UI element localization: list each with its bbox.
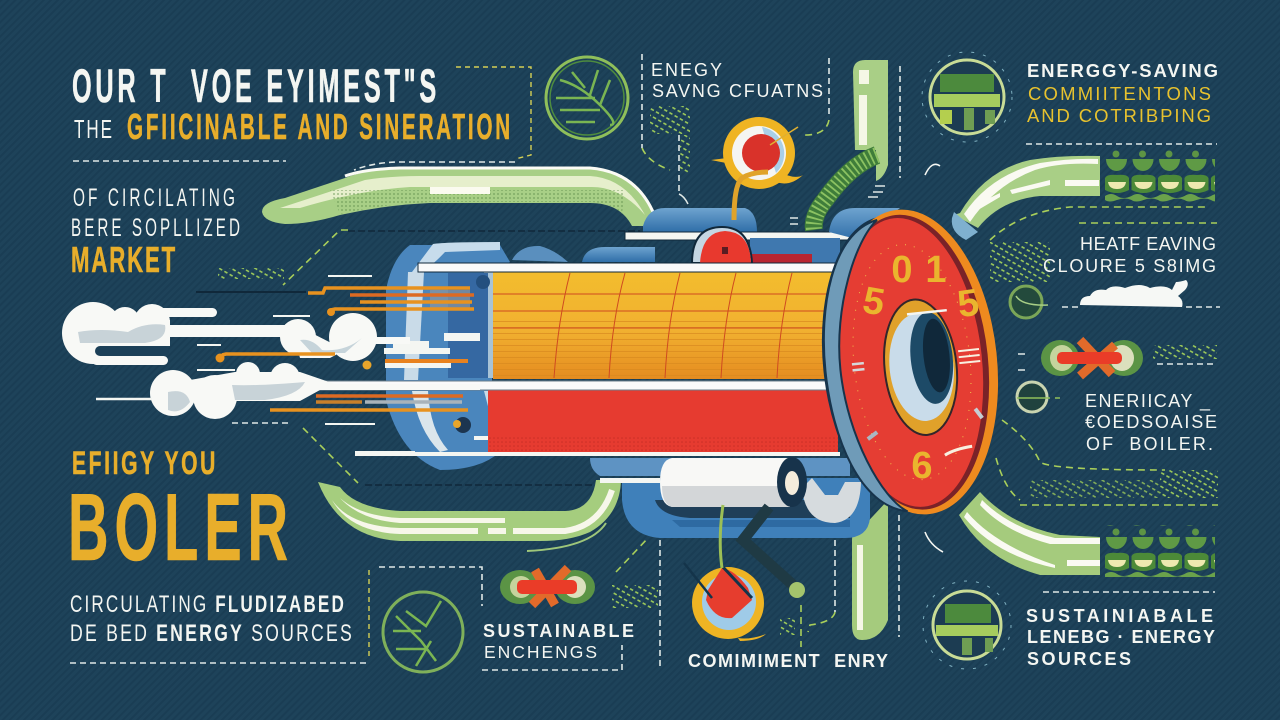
boiler heading: [68, 445, 294, 581]
dial numbers: 1: [925, 249, 947, 291]
boiler subtext: DE BED ENERGY SOURCES: [70, 620, 354, 647]
frame dashes and connectors: [70, 230, 899, 670]
label: commitment energy: COMIMIMENT ENRY: [688, 651, 888, 671]
label: sustainable energy sources: [1026, 606, 1215, 669]
pipe: lower right green: [925, 492, 1100, 575]
label: energy saving commitments: ENERGGY-SAVING: [1027, 60, 1218, 81]
subheading market: [71, 184, 243, 280]
dial numbers: [860, 249, 982, 487]
icon: small green circle upper: [1010, 286, 1048, 318]
label: sustainable enchengs: ENCHENGS: [484, 642, 597, 662]
right connector dashes: [925, 144, 1217, 282]
label: heat saving: HEATF EAVING: [1080, 234, 1216, 254]
label: efficiency of boiler: OF BOILER.: [1086, 434, 1213, 454]
dial numbers: 6: [911, 445, 933, 487]
divider lower right: [1043, 591, 1215, 593]
label: energy saving commitments: AND COTRIBPING: [1027, 105, 1211, 126]
icon: leaf circle bottom: [383, 592, 463, 672]
label: sustainable energy sources: SOURCES: [1027, 649, 1131, 669]
boiler subtext: CIRCULATING FLUDIZABED: [70, 591, 346, 618]
dial numbers: 5: [955, 282, 982, 326]
label: heat saving: CLOURE 5 S8IMG: [1043, 256, 1216, 276]
subheading market: MARKET: [71, 239, 177, 280]
white bands: [300, 263, 848, 456]
title block: THE: [74, 114, 114, 144]
label: efficiency of boiler: [1085, 391, 1217, 454]
pipe: upper right green: [952, 156, 1100, 240]
dial numbers: 5: [860, 279, 888, 324]
icon: circuit circle top right: [922, 52, 1012, 142]
top connector dashes: [642, 54, 900, 224]
icon: red knot right: [1041, 340, 1143, 376]
red dial disc: [808, 201, 1013, 524]
pipe: lower centre green: [852, 500, 888, 640]
label: efficiency of boiler: ENERIICAY _: [1085, 391, 1211, 412]
icon: red bucket with yellow ring: [684, 505, 766, 641]
label: energy saving commitments: [1027, 60, 1218, 126]
orange exhaust lines: [196, 288, 474, 410]
pattern strip upper right: [1105, 150, 1215, 204]
label: efficiency of boiler: €OEDSOAISE: [1085, 412, 1217, 432]
pipe: upper centre green with ribbed hose: [814, 60, 888, 230]
orange drum section: [493, 272, 840, 379]
icon: circuit circle bottom right: [923, 581, 1011, 669]
icon: leaf circle top: [546, 57, 628, 139]
label: heat saving: [1043, 234, 1216, 276]
label: sustainable enchengs: SUSTAINABLE: [483, 621, 634, 641]
subheading market: OF CIRCILATING: [73, 184, 238, 212]
boiler subtext: [70, 591, 354, 647]
boiler heading: BOLER: [68, 474, 294, 581]
left flange: [384, 242, 568, 470]
steam clouds: [62, 302, 480, 419]
title frame dashes: [73, 67, 531, 170]
top housings: [582, 208, 900, 263]
subheading market: BERE SOPLLIZED: [71, 214, 243, 242]
icon: red valve with yellow ring: [711, 117, 803, 220]
pipe: upper left green: [262, 168, 660, 226]
title block: [72, 59, 513, 147]
icon: small cloud: [1062, 280, 1220, 307]
title block: OUR T VOE EYIMEST"S: [72, 59, 440, 112]
boiler machine: [300, 201, 1013, 538]
label: energy saving top: [651, 60, 823, 101]
label: sustainable enchengs: [483, 621, 634, 662]
label: energy saving top: ENEGY: [651, 60, 722, 80]
red drum section: [488, 390, 838, 453]
boiler heading: EFIIGY YOU: [72, 445, 218, 481]
lower pipes and cylinder: [590, 457, 870, 538]
label: sustainable energy sources: LENEBG · ENERGY: [1027, 627, 1215, 647]
title block: GFIICINABLE AND SINERATION: [127, 106, 513, 147]
label: energy saving commitments: COMMIITENTONS: [1028, 83, 1211, 104]
label: sustainable energy sources: SUSTAINIABALE: [1026, 606, 1213, 626]
icon: small green circle lower: [1017, 382, 1060, 412]
icon: crank handle: [743, 507, 805, 598]
right dots and dashes: [1018, 345, 1217, 370]
label: energy saving top: SAVNG CFUATNS: [652, 81, 823, 101]
lower right connectors: [996, 420, 1218, 505]
pipe: lower left green: [318, 480, 621, 551]
icon: red knot bottom: [500, 568, 595, 605]
dial numbers: 0: [891, 249, 913, 291]
pattern strip lower right: [1105, 525, 1215, 577]
